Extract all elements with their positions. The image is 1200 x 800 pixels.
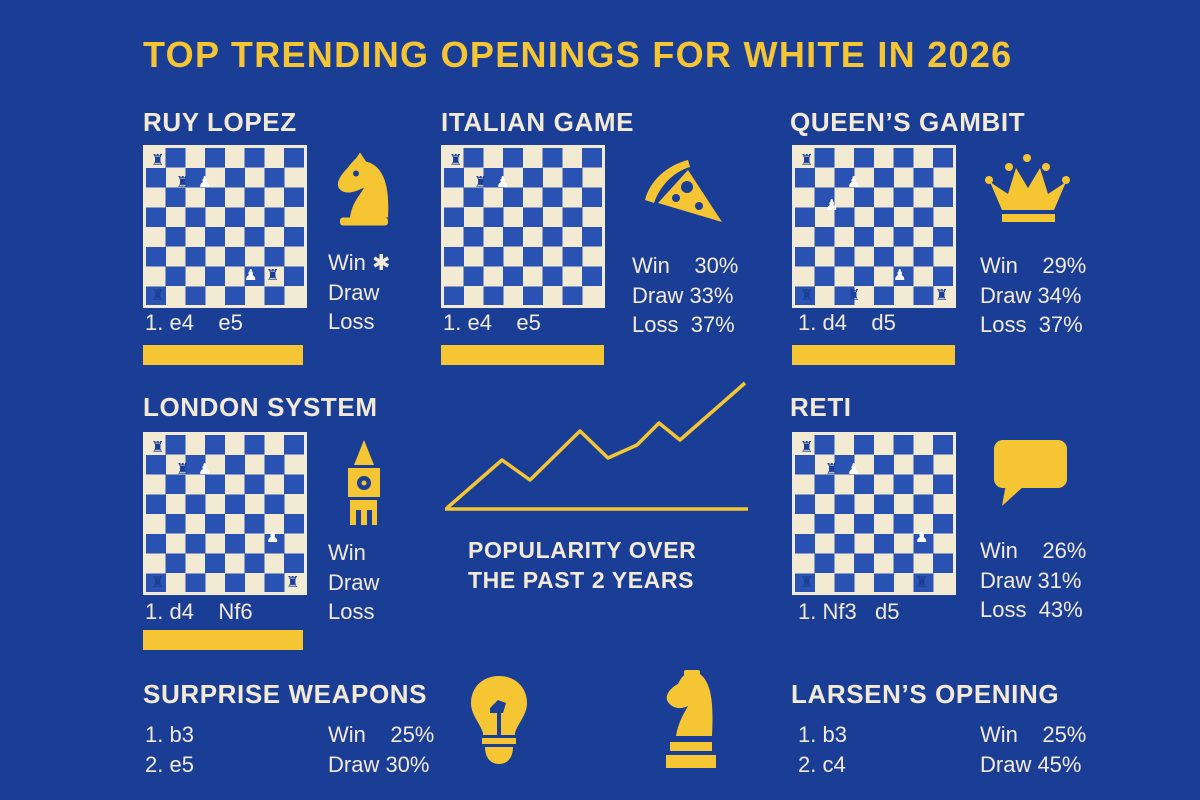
bar	[143, 345, 303, 365]
moves: 1. e4 e5	[145, 310, 243, 335]
stats: Win	[328, 540, 366, 565]
board: ruy lopez: ♜	[151, 152, 164, 169]
board: ♜	[915, 574, 928, 591]
stats: Win 25%	[328, 722, 434, 747]
moves	[145, 722, 194, 777]
stats: Win ✱	[328, 250, 390, 275]
stats	[980, 722, 1086, 777]
stats: Loss	[328, 309, 374, 334]
chart caption: THE PAST 2 YEARS	[468, 567, 694, 593]
stats	[980, 538, 1086, 622]
moves: 1. b3	[145, 722, 194, 747]
panel: italian game	[441, 107, 738, 365]
stats	[328, 250, 390, 334]
board	[792, 145, 956, 308]
board: ♜	[825, 461, 838, 478]
title: TOP TRENDING OPENINGS FOR WHITE IN 2026	[143, 34, 1013, 75]
board: ♜	[935, 287, 948, 304]
board: ♟	[266, 529, 279, 546]
stats: Draw	[328, 280, 379, 304]
board: ruy lopez: ♜	[266, 267, 279, 284]
stats: Draw 45%	[980, 752, 1081, 777]
stats	[632, 253, 738, 337]
board: ♜	[847, 287, 860, 304]
stats: Loss	[328, 599, 374, 624]
moves: 1. d4 d5	[798, 310, 896, 335]
stats: Win 25%	[980, 722, 1086, 747]
board	[441, 145, 605, 308]
bar	[441, 345, 604, 365]
moves	[798, 722, 847, 777]
board: ♜	[800, 152, 813, 169]
board: ruy lopez: ♟	[198, 174, 211, 191]
stats: Loss 43%	[980, 597, 1083, 622]
moves: 1. d4 Nf6	[145, 599, 253, 624]
stats	[328, 540, 380, 624]
panel: larsens opening	[791, 679, 1086, 777]
panel: reti	[790, 392, 1086, 624]
bar	[792, 345, 955, 365]
icon: speech bubble	[994, 440, 1067, 506]
stats: Draw	[328, 570, 379, 594]
stats: Draw 31%	[980, 568, 1081, 592]
board: ♟	[496, 174, 509, 191]
board: ♟	[198, 461, 211, 478]
panel: surprise weapons	[143, 679, 434, 777]
moves: 1. b3	[798, 722, 847, 747]
moves: 1. e4 e5	[443, 310, 541, 335]
board: ♜	[176, 461, 189, 478]
stats: Loss 37%	[632, 312, 735, 337]
heading: ruy lopez: RUY LOPEZ	[143, 107, 297, 137]
heading: ITALIAN GAME	[441, 107, 634, 137]
chart caption: POPULARITY OVER	[468, 537, 696, 563]
heading: SURPRISE WEAPONS	[143, 679, 427, 709]
bar	[143, 630, 303, 650]
board: ♟	[825, 197, 838, 214]
board	[143, 432, 307, 595]
icon: pizza	[645, 160, 722, 222]
panel: queens gambit	[790, 107, 1086, 365]
stats: Win 29%	[980, 253, 1086, 278]
stats: Loss 37%	[980, 312, 1083, 337]
panel: ruy lopez	[143, 107, 390, 365]
heading: LONDON SYSTEM	[143, 392, 378, 422]
icon: crown	[985, 154, 1070, 222]
board: ruy lopez	[143, 145, 307, 308]
board: ♜	[474, 174, 487, 191]
board: ♜	[449, 152, 462, 169]
heading: LARSEN’S OPENING	[791, 679, 1059, 709]
stats: Draw 33%	[632, 282, 733, 308]
heading: RETI	[790, 392, 852, 422]
board: ruy lopez: ♜	[176, 174, 189, 191]
board: ruy lopez: ♟	[244, 267, 257, 284]
board: ♟	[893, 267, 906, 284]
stats: Win 30%	[632, 253, 738, 278]
board: ♟	[915, 529, 928, 546]
board: ♜	[286, 574, 299, 591]
stats: Win 26%	[980, 538, 1086, 563]
board: ♜	[151, 439, 164, 456]
board: ♜	[151, 574, 164, 591]
icon: knight	[338, 152, 388, 226]
stats	[328, 722, 434, 777]
board: ♟	[847, 174, 860, 191]
moves: 2. e5	[145, 752, 194, 777]
moves: 1. Nf3 d5	[798, 599, 900, 624]
board: ♜	[800, 287, 813, 304]
board: ♟	[847, 461, 860, 478]
icon: big ben	[348, 440, 380, 525]
panel: london system	[143, 392, 380, 650]
stats: Draw 34%	[980, 282, 1081, 308]
moves: 2. c4	[798, 752, 846, 777]
stats: Draw 30%	[328, 752, 429, 777]
board: ♜	[800, 439, 813, 456]
stats	[980, 253, 1086, 337]
chart caption	[468, 537, 696, 593]
chart: popularity	[445, 382, 748, 593]
icon: knight piece	[666, 670, 716, 768]
board: ♜	[800, 574, 813, 591]
board: ruy lopez: ♜	[151, 287, 164, 304]
heading: QUEEN’S GAMBIT	[790, 107, 1025, 137]
board	[792, 432, 956, 595]
icon: light bulb	[471, 676, 527, 764]
